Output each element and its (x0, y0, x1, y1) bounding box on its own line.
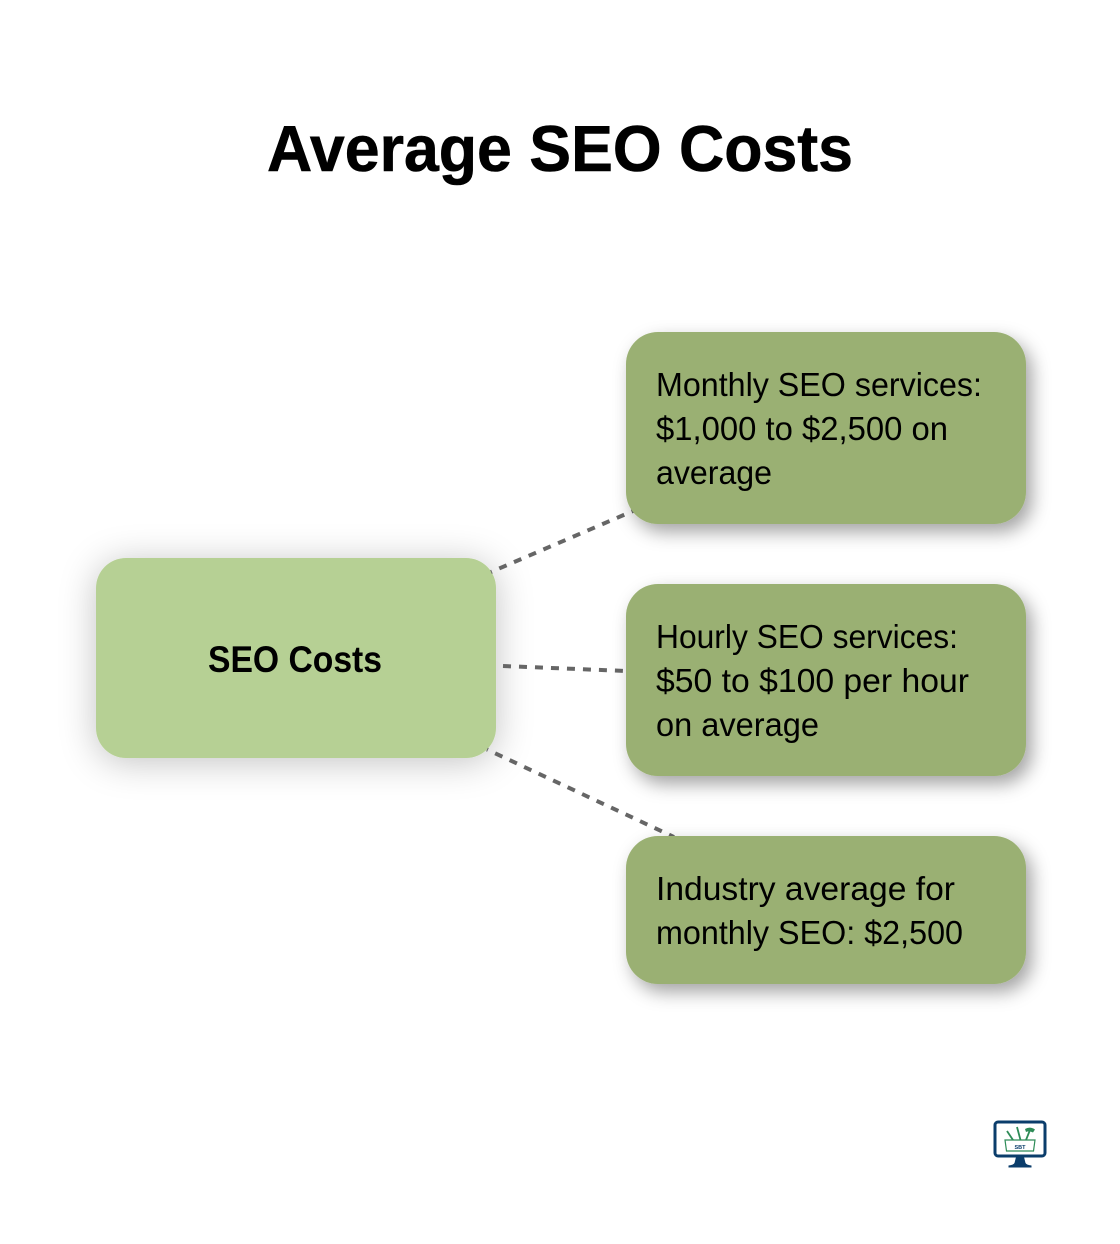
box: industry average: Industry average for (656, 870, 955, 907)
box: hourly SEO services: $50 to $100 per hour (656, 662, 969, 699)
box: monthly SEO services: Monthly SEO services: (656, 366, 982, 403)
box: industry average (626, 836, 1026, 984)
connector: SEO Costs to monthly services (491, 508, 640, 572)
icon: SBT monitor logo: SBT (1014, 1145, 1026, 1151)
box: monthly SEO services: $1,000 to $2,500 on (656, 410, 948, 447)
box: hourly SEO services: Hourly SEO services: (656, 618, 958, 655)
icon: SBT monitor logo (995, 1122, 1045, 1168)
box: hourly SEO services: on average (656, 706, 819, 743)
box: hourly SEO services (626, 584, 1026, 776)
connector: SEO Costs to hourly services (503, 666, 626, 671)
box: monthly SEO services: average (656, 454, 772, 491)
central box: SEO Costs (96, 558, 496, 758)
central box: SEO Costs: SEO Costs (208, 639, 382, 680)
connector: SEO Costs to industry average (487, 750, 674, 837)
box: industry average: monthly SEO: $2,500 (656, 914, 963, 951)
title: Average SEO Costs (267, 112, 853, 185)
box: monthly SEO services (626, 332, 1026, 524)
